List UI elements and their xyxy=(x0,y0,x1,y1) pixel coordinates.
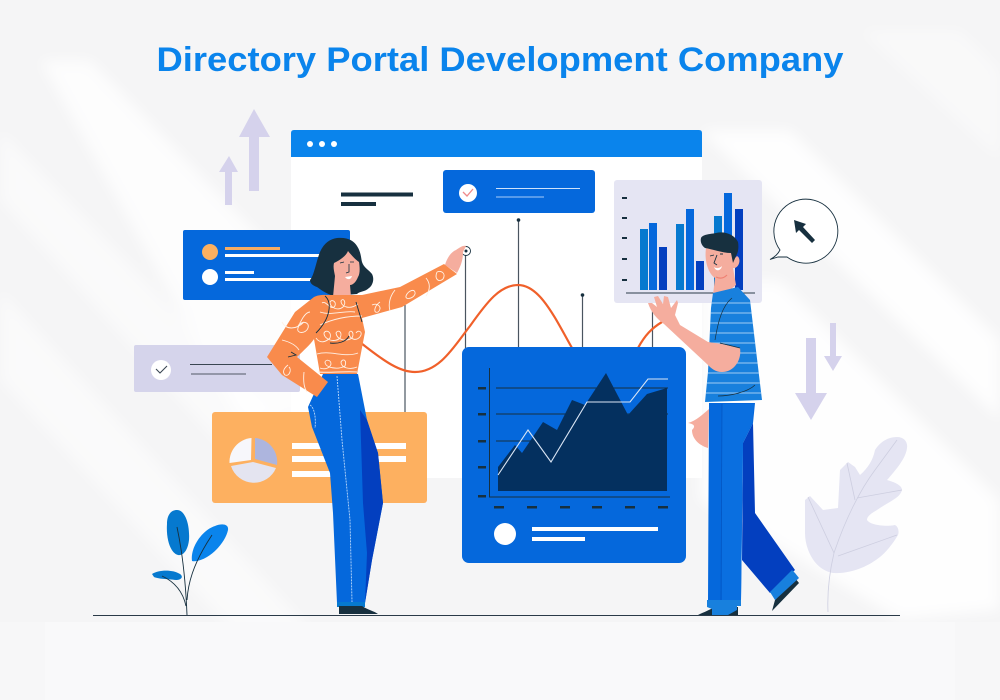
woman: sweater and arms xyxy=(267,264,457,397)
woman: jeans xyxy=(308,374,383,603)
man: facial features xyxy=(710,254,723,265)
man: pants xyxy=(708,403,755,600)
card: lavender check xyxy=(134,345,300,392)
woman: smile xyxy=(345,276,352,279)
man: shirt stripes xyxy=(706,302,762,394)
woman xyxy=(267,238,466,614)
woman: cuff xyxy=(337,602,365,607)
trend curve xyxy=(361,285,662,372)
woman: jeans seam xyxy=(310,376,352,602)
man: back cuff xyxy=(770,570,799,600)
man: mouth shadow xyxy=(716,275,727,278)
plant: blue sprout xyxy=(152,510,228,615)
man: smile xyxy=(714,266,722,270)
plant: lavender leaf xyxy=(805,437,907,612)
speech bubble with cursor xyxy=(770,199,838,263)
target marker xyxy=(462,246,470,256)
woman: raised hand xyxy=(445,246,466,273)
man: pants seam xyxy=(721,404,722,600)
man: neck and face xyxy=(706,248,739,295)
man: shirt folds xyxy=(715,298,755,396)
man: hair xyxy=(701,232,738,263)
man: back shoe xyxy=(772,578,799,611)
woman: jeans shadow xyxy=(360,410,383,603)
man: lower hand xyxy=(688,409,709,448)
title: Directory Portal Development Company xyxy=(156,41,844,79)
woman: shoes xyxy=(339,606,378,614)
man: front shoe xyxy=(698,607,738,615)
man: pants highlight xyxy=(722,404,754,600)
panel: bar chart xyxy=(614,180,762,303)
woman: hair xyxy=(310,238,373,296)
man xyxy=(648,232,799,615)
man: front cuff xyxy=(707,600,741,615)
arrows down xyxy=(795,323,842,420)
arrows up xyxy=(219,109,270,205)
card: orange pie xyxy=(212,412,427,503)
man: shirt xyxy=(705,287,762,402)
card: top blue check xyxy=(443,170,595,213)
ground line xyxy=(93,614,900,616)
panel: area chart xyxy=(462,347,686,563)
card: left blue list xyxy=(183,230,350,300)
man: sleeve edge xyxy=(720,343,740,348)
woman: facial features xyxy=(340,262,354,273)
woman: sweater pattern xyxy=(282,271,444,392)
woman: face and neck xyxy=(333,251,360,297)
man: back leg xyxy=(742,423,795,593)
man: arm and hand xyxy=(648,296,740,372)
connector lines xyxy=(405,218,652,412)
woman: sweater folds xyxy=(288,296,362,357)
browser window xyxy=(291,130,702,478)
woman: lower hand xyxy=(322,384,340,402)
